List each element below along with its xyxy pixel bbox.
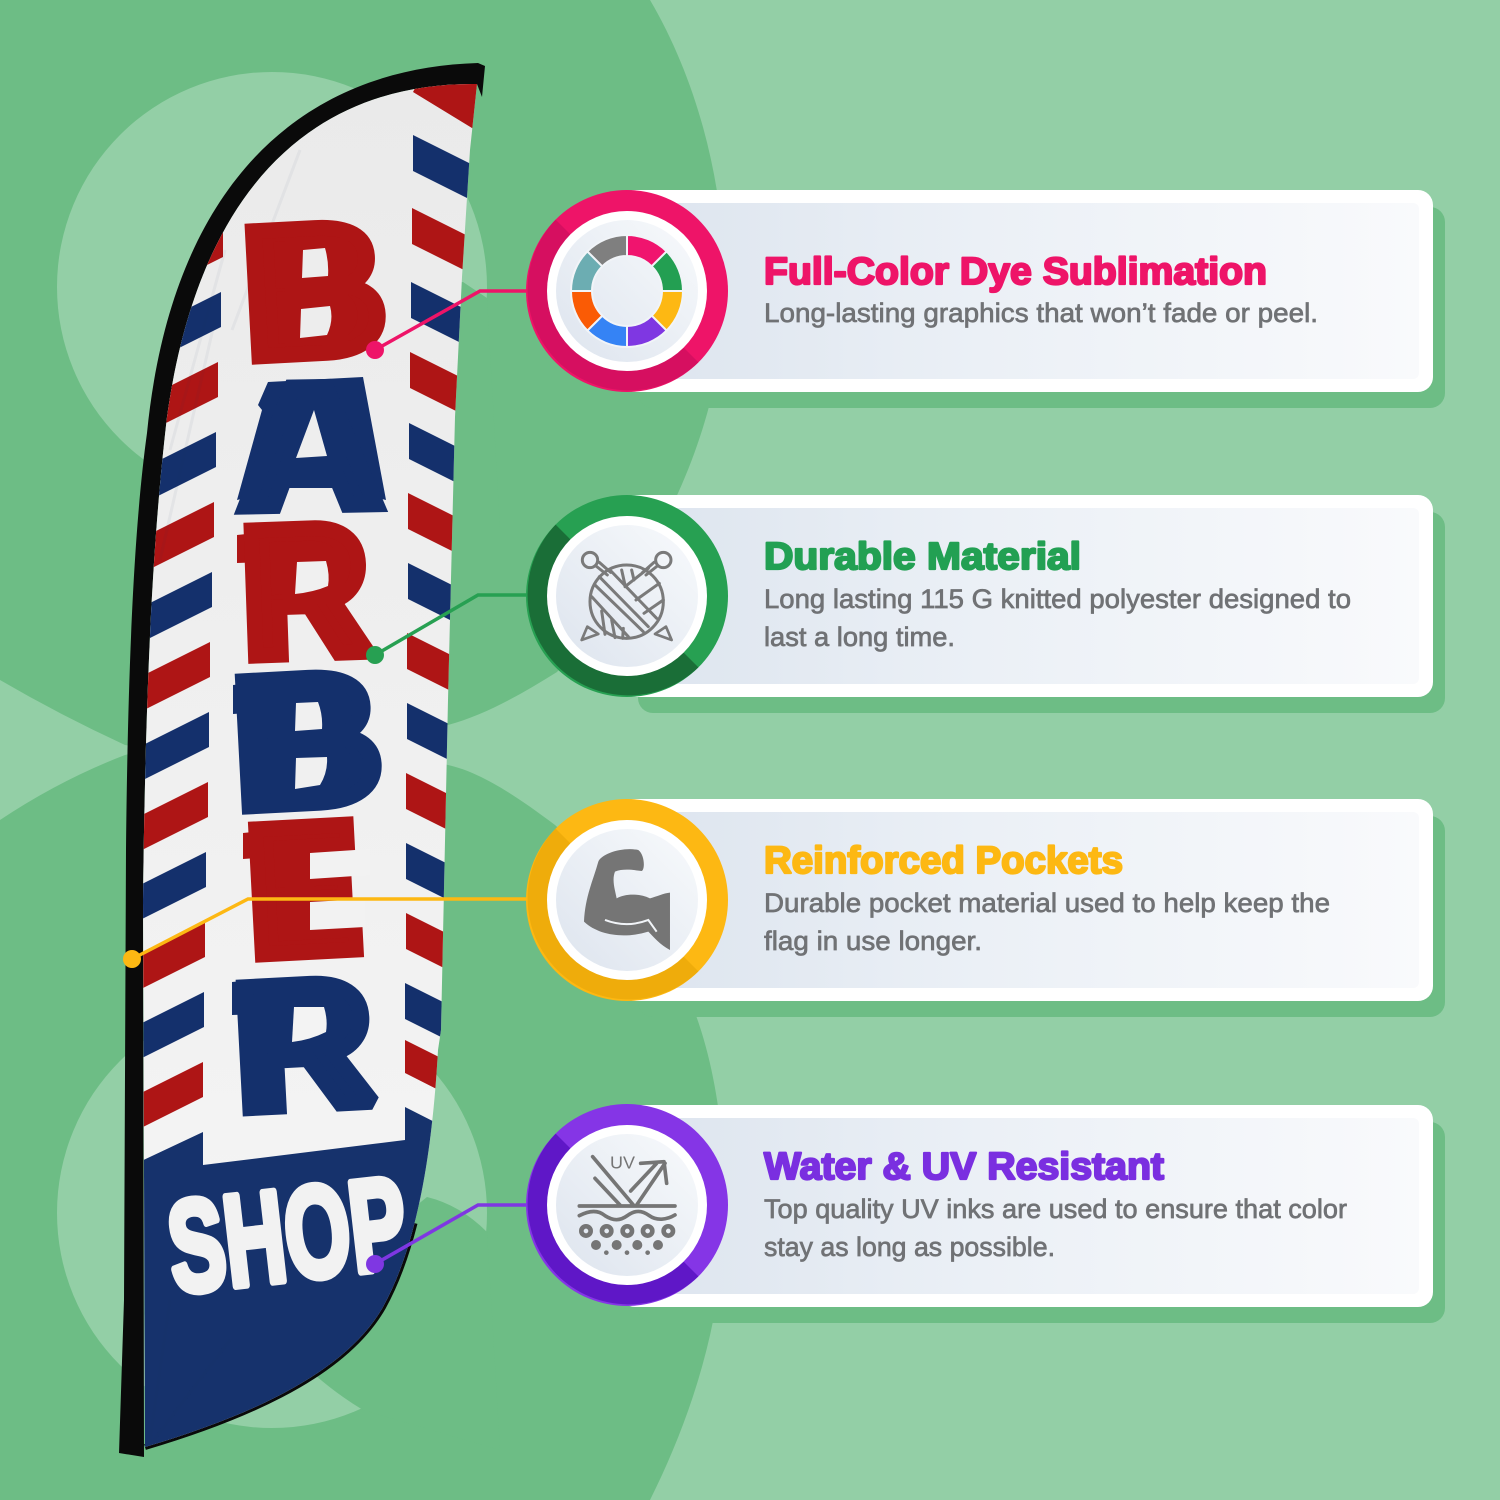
stripes: navy — [143, 135, 470, 1058]
heading: Durable Material — [764, 536, 1081, 578]
heading: Full-Color Dye Sublimation — [764, 251, 1267, 293]
description: last a long time. — [764, 622, 955, 652]
icon: UV protection layers: UV — [610, 1153, 635, 1173]
fabric folds — [166, 150, 301, 526]
icon ring: green — [526, 495, 728, 697]
description: Top quality UV inks are used to ensure that color — [764, 1194, 1347, 1224]
panel: Durable Material — [526, 495, 1445, 713]
icon: colour wheel — [571, 235, 683, 347]
description: stay as long as possible. — [764, 1232, 1055, 1262]
word SHOP: SHOP — [161, 1149, 414, 1321]
flag — [110, 60, 500, 1480]
icon: UV protection layers — [579, 1153, 675, 1255]
connector: purple — [366, 1205, 528, 1273]
icon: flexed arm — [584, 849, 670, 950]
heading: Reinforced Pockets — [764, 840, 1123, 882]
letter B: B — [228, 635, 386, 846]
letter R: R — [230, 942, 378, 1146]
panel: Reinforced Pockets — [526, 799, 1445, 1017]
letter R: R — [238, 487, 372, 695]
flag lower edge — [145, 1050, 438, 1447]
description — [764, 888, 1330, 956]
description: flag in use longer. — [764, 926, 982, 956]
letter B: B — [238, 185, 390, 396]
stripes: red — [143, 84, 477, 1127]
icon ring: pink — [526, 190, 728, 392]
connector: yellow — [123, 899, 528, 968]
description: Durable pocket material used to help keep the — [764, 888, 1330, 918]
letter E: E — [242, 784, 365, 994]
description — [764, 1194, 1347, 1262]
icon ring: purple — [526, 1104, 728, 1306]
navy bottom field — [144, 1107, 432, 1447]
panel: Water & UV Resistant — [526, 1104, 1445, 1323]
heading: Water & UV Resistant — [764, 1146, 1164, 1188]
description — [764, 584, 1351, 652]
description: Long-lasting graphics that won’t fade or peel. — [764, 298, 1318, 328]
icon ring: yellow — [526, 799, 728, 1001]
connector: pink — [366, 291, 528, 359]
description: Long lasting 115 G knitted polyester designed to — [764, 584, 1351, 614]
flag pole sleeve — [119, 63, 485, 1457]
flag fabric with stripes — [143, 84, 477, 1447]
connector: green — [366, 595, 528, 664]
letter A: A — [238, 348, 382, 544]
icon: yarn ball and needles — [582, 552, 672, 640]
panel: Full-Color Dye Sublimation — [526, 190, 1445, 408]
